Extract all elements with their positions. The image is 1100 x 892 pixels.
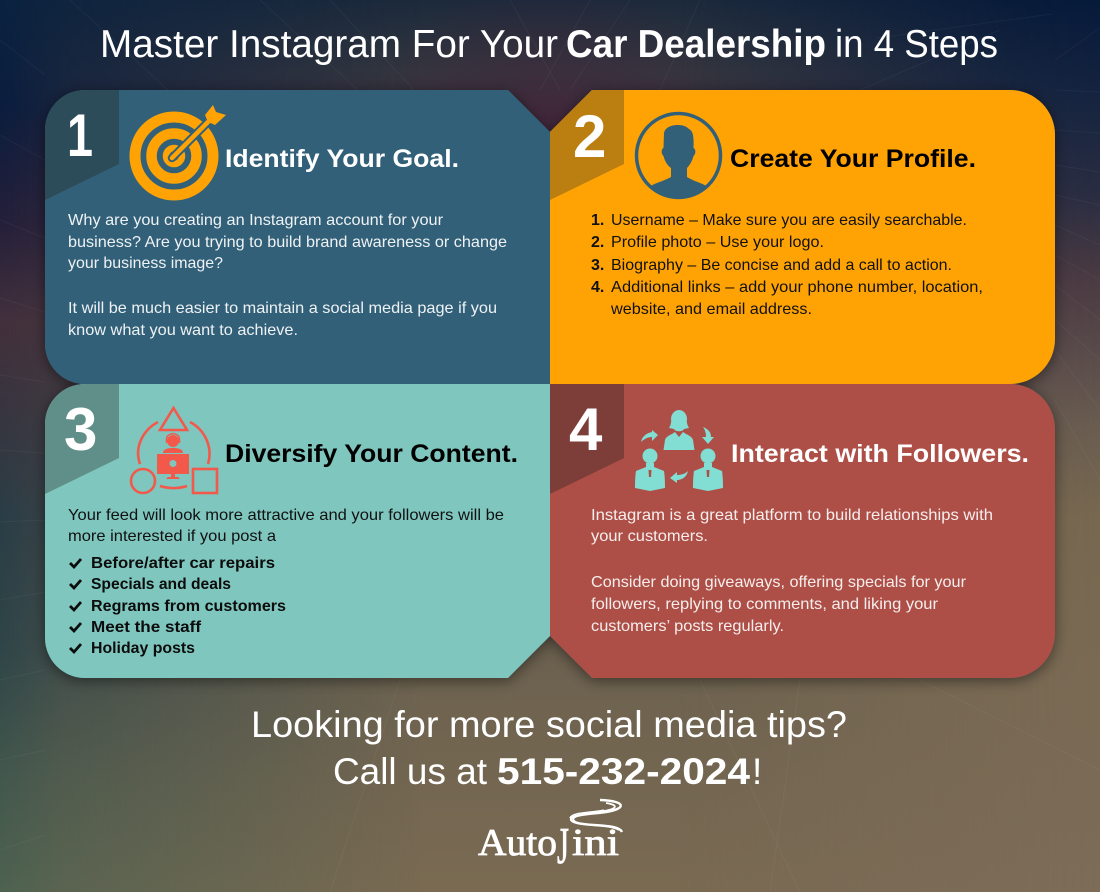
panels shadow base — [45, 90, 1055, 678]
number tab 2: 2 — [573, 103, 606, 170]
heading: Identify Your Goal.: Identify Your Goal. — [225, 145, 459, 173]
numbered list: Biography – Be concise and add a call to action. — [611, 257, 952, 274]
number tab 1 — [45, 90, 119, 200]
number tab 1: 1 — [67, 102, 93, 169]
logo: AutoJini: J — [557, 818, 569, 875]
title — [100, 23, 998, 66]
logo: AutoJini: ini — [572, 822, 619, 864]
heading: Interact with Followers.: Interact with Followers. — [731, 440, 1029, 468]
logo: AutoJini: Auto — [478, 822, 557, 864]
number tab 3: 3 — [64, 396, 97, 463]
body text 4: Instagram is a great platform to build relationships with — [591, 507, 993, 524]
checklist: Specials and deals — [91, 576, 231, 593]
numbered list: 3. — [591, 257, 604, 274]
body text 1: Why are you creating an Instagram account for your — [68, 212, 444, 229]
checklist: Regrams from customers — [91, 598, 286, 615]
body text 1 — [68, 212, 507, 339]
body text 1: It will be much easier to maintain a social media page if you — [68, 300, 497, 317]
body text 4: customers’ posts regularly. — [591, 618, 784, 635]
body text 1: know what you want to achieve. — [68, 322, 298, 339]
number tab 4: 4 — [569, 396, 603, 463]
icon: content shapes around person at monitor — [131, 408, 217, 493]
body text 3: Your feed will look more attractive and your followers will be — [68, 507, 504, 524]
numbered list: 4. — [591, 279, 604, 296]
heading: Create Your Profile.: Create Your Profile. — [730, 145, 976, 173]
call to action — [251, 704, 847, 792]
panel 4: interact with followers — [550, 384, 1055, 678]
logo: AutoJini — [478, 800, 622, 875]
numbered list: 1. — [591, 212, 604, 229]
body text 3 — [68, 507, 504, 545]
title: Master Instagram For Your — [100, 23, 558, 66]
call to action: Call us at — [333, 751, 488, 792]
body text 4: your customers. — [591, 528, 708, 545]
panel 2: create your profile — [550, 90, 1055, 384]
number tab 3 — [45, 384, 119, 494]
numbered list: Username – Make sure you are easily searchable. — [611, 212, 967, 229]
panel 1: identify your goal — [45, 90, 550, 384]
body text 3: more interested if you post a — [68, 528, 276, 545]
icon: people with arrows — [635, 410, 723, 491]
call to action: 515-232-2024 — [497, 751, 750, 792]
icon: target with arrow — [135, 105, 226, 195]
call to action: Looking for more social media tips? — [251, 704, 847, 745]
numbered list: Profile photo – Use your logo. — [611, 234, 824, 251]
title: in 4 Steps — [835, 23, 998, 66]
numbered list: website, and email address. — [610, 301, 812, 318]
number tab 4 — [550, 384, 624, 494]
numbered list — [591, 212, 983, 318]
checklist: Meet the staff — [91, 619, 202, 636]
body text 4 — [591, 507, 993, 635]
body text 1: business? Are you trying to build brand awareness or change — [68, 234, 507, 251]
numbered list: Additional links – add your phone number, location, — [611, 279, 983, 296]
title: Car Dealership — [566, 23, 826, 66]
body text 4: followers, replying to comments, and liking your — [591, 596, 939, 613]
checklist: Holiday posts — [91, 640, 195, 657]
panel 3: diversify your content — [45, 384, 550, 678]
heading: Diversify Your Content.: Diversify Your Content. — [225, 440, 518, 468]
checklist: Before/after car repairs — [91, 555, 275, 572]
number tab 2 — [550, 90, 624, 200]
numbered list: 2. — [591, 234, 604, 251]
checklist — [70, 555, 286, 657]
call to action: ! — [752, 751, 762, 792]
body text 4: Consider doing giveaways, offering specials for your — [591, 574, 967, 591]
body text 1: your business image? — [68, 255, 223, 272]
icon: profile silhouette — [636, 114, 720, 198]
